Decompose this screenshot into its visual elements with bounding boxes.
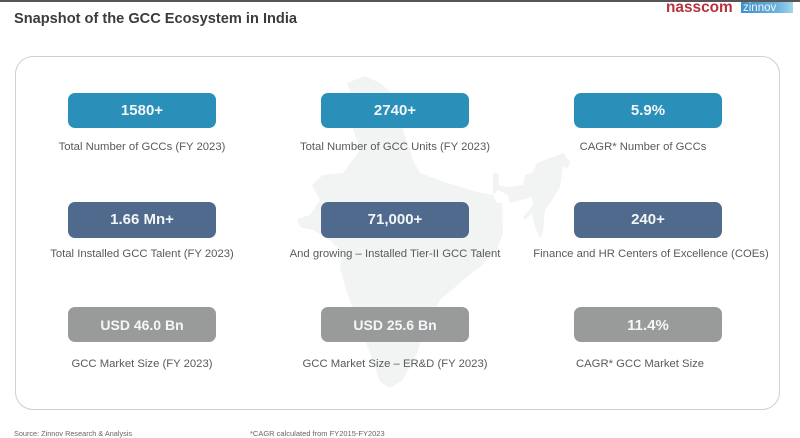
source note: Source: Zinnov Research & Analysis [14,429,132,438]
stat: USD 25.6 Bn: USD 25.6 Bn [353,317,437,333]
label: total GCCs: Total Number of GCCs (FY 2023) [59,141,225,153]
label: GCC units: Total Number of GCC Units (FY 2023) [300,141,490,153]
stat: 71,000+: 71,000+ [368,211,422,228]
label: ER&D market size: GCC Market Size – ER&D (FY 2023) [302,358,488,370]
stat: 11.4% [574,307,722,342]
stat: 1.66 Mn+ [68,202,216,238]
label: finance and HR COEs: Finance and HR Centers of Excellence (COEs) [533,248,769,260]
CAGR footnote: *CAGR calculated from FY2015-FY2023 [250,429,385,438]
title: Snapshot of the GCC Ecosystem in India [14,11,297,27]
stat: 2740+: 2740+ [374,102,416,119]
stat: 5.9% [574,93,722,128]
stat: USD 46.0 Bn [68,307,216,342]
stat: 11.4%: 11.4% [627,317,669,334]
stat: USD 46.0 Bn: USD 46.0 Bn [100,317,184,333]
stat: 1580+ [68,93,216,128]
stat: 1.66 Mn+: 1.66 Mn+ [110,211,174,228]
label: CAGR market size: CAGR* GCC Market Size [576,358,704,370]
stat: 2740+ [321,93,469,128]
label: tier-II talent: And growing – Installed Tier-II GCC Talent [290,248,500,260]
stat: 5.9%: 5.9% [631,102,665,119]
stat: 71,000+ [321,202,469,238]
stat: 240+: 240+ [631,211,665,228]
stat: USD 25.6 Bn [321,307,469,342]
stat: 1580+: 1580+ [121,102,163,119]
stat: 240+ [574,202,722,238]
panel: main container [15,56,780,410]
label: installed talent: Total Installed GCC Talent (FY 2023) [50,248,234,260]
label: market size: GCC Market Size (FY 2023) [71,358,213,370]
logo: zinnov [741,2,793,13]
top bar [0,0,800,2]
label: CAGR GCCs: CAGR* Number of GCCs [580,141,706,153]
